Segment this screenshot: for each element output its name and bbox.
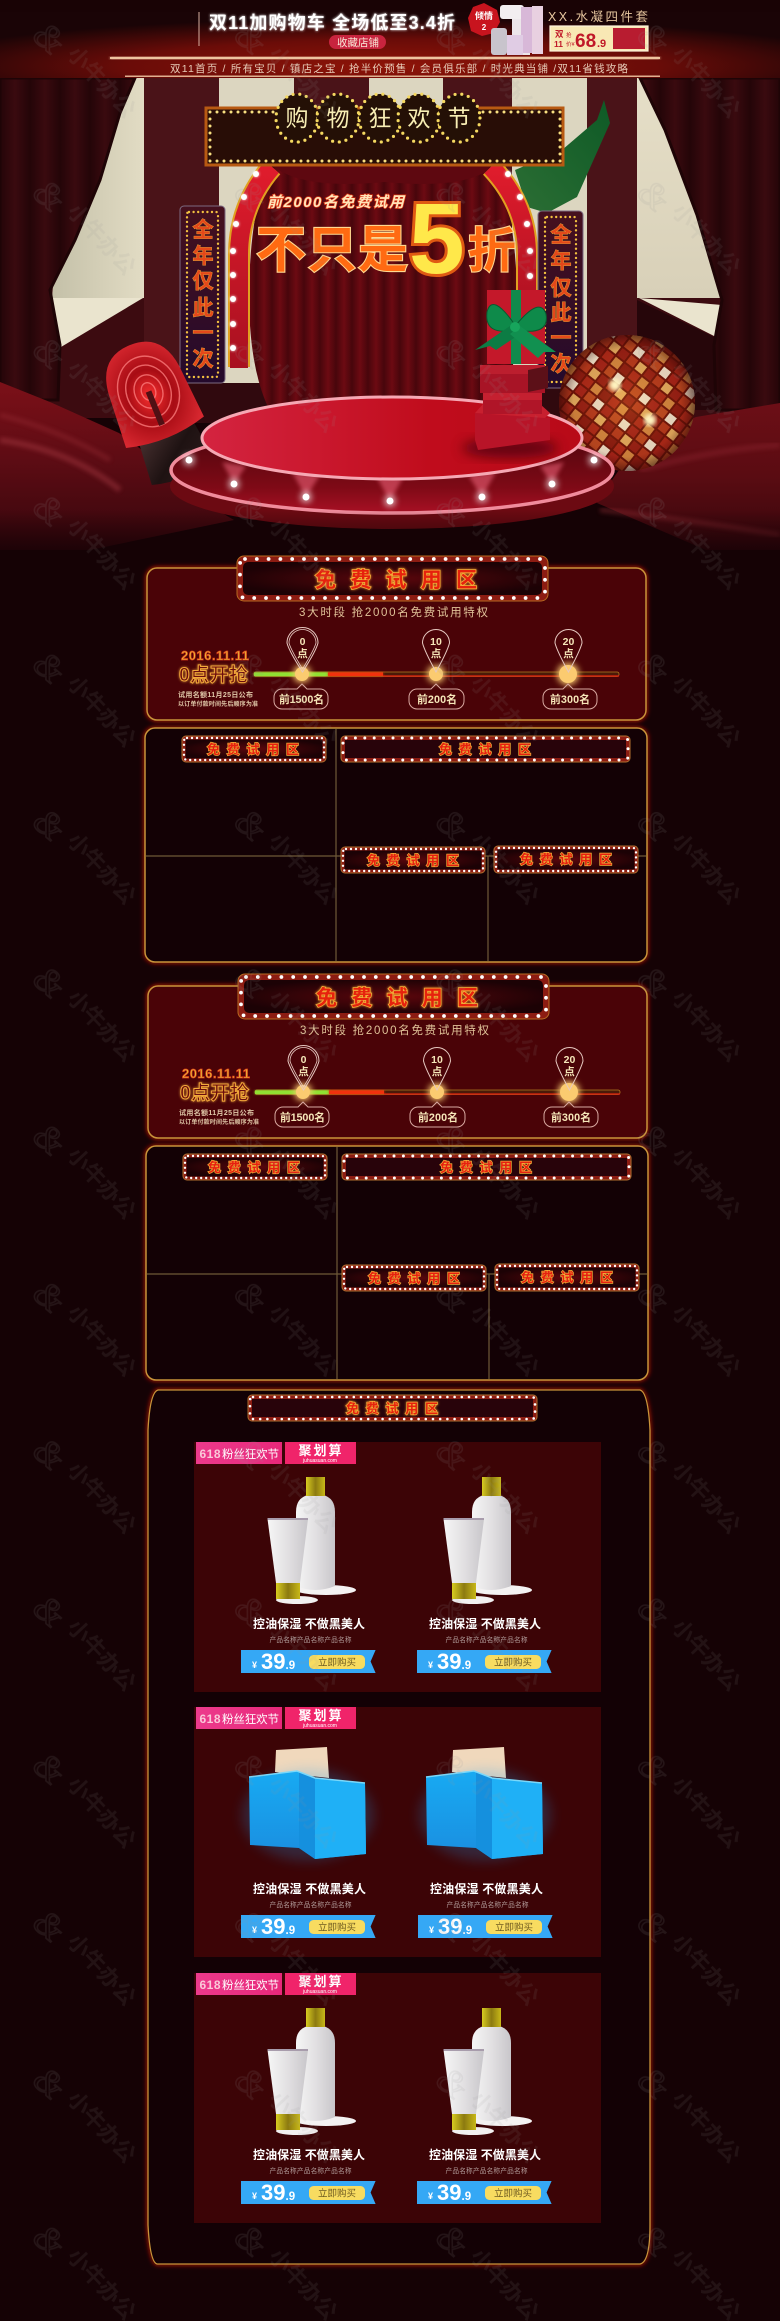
badge row 3: 618	[196, 1973, 282, 1995]
right wall shadow block	[637, 300, 716, 410]
badge: 聚划算: 聚划算	[298, 1443, 342, 1458]
panel	[147, 568, 646, 720]
side board: left: 此	[192, 297, 214, 320]
stage spotlight cones	[222, 462, 564, 501]
pin 2: 20点: 20	[564, 1054, 575, 1066]
grid 2 lines	[147, 1147, 647, 1379]
bubble 2: 前200名	[410, 1102, 465, 1127]
hero wall: stripes	[144, 78, 637, 423]
headline: 前2000名免费试用	[267, 194, 406, 211]
headline	[256, 183, 516, 295]
header lower rule	[125, 76, 660, 77]
plate: C	[341, 847, 485, 873]
badge row 2: 618: 粉丝狂欢节	[222, 1712, 279, 1726]
bubble 2: 前300名: 前300名	[551, 1110, 591, 1124]
price ribbon row 3b: ¥	[428, 2191, 433, 2201]
title plate	[237, 556, 548, 601]
price ribbon row 2b: ¥	[429, 1925, 434, 1935]
price ribbon row 3: 39	[261, 2180, 285, 2205]
section: product grid 1	[145, 728, 647, 962]
price ribbon row 2: 立即购买	[318, 1922, 356, 1934]
price ribbon 2: 立即购买	[494, 1656, 532, 1668]
header price box: 双	[555, 29, 564, 39]
price ribbon row 2: .9	[286, 1925, 295, 1937]
header price box: 价¥	[566, 41, 576, 48]
curtain: right	[640, 78, 780, 410]
header price box	[550, 26, 648, 52]
marquee arch	[230, 167, 533, 368]
price ribbon row 2	[241, 1914, 376, 1939]
date block 2: 2016.11.11	[182, 1066, 250, 1081]
headline: 折	[468, 225, 516, 278]
gift box stack	[462, 365, 558, 458]
plate: D: 免费试用区	[520, 852, 612, 867]
sign: 购物狂欢节: 购	[286, 105, 308, 131]
pin: 10点	[422, 629, 450, 672]
plate 2: B: 免费试用区	[440, 1160, 532, 1175]
badge row 3: 聚划算	[285, 1973, 356, 1995]
badge: 聚划算: juhuasuan.com	[302, 1458, 337, 1464]
header nav: 双11首页 / 所有宝贝 / 镇店之宝 / 抢半价预售 / 会员俱乐部 / 时光典当铺 /双11省钱攻略	[170, 62, 628, 75]
product subtitle row 2: 产品名称产品名称产品名称	[270, 1900, 352, 1909]
date block 2: 0点开抢	[180, 1081, 249, 1104]
price ribbon row 3b: 立即购买	[494, 2188, 532, 2200]
badge row 2: 618	[196, 1707, 282, 1729]
card 1 background	[194, 1442, 601, 1692]
bubble 2: 前1500名	[275, 1102, 329, 1127]
grid glow	[145, 728, 647, 962]
side board: right: 此	[550, 302, 572, 325]
header price box: 68	[575, 31, 596, 52]
hero wall: right cream window	[637, 78, 722, 298]
stage	[170, 397, 614, 529]
pin: 0点	[287, 628, 318, 672]
header price box: 11	[554, 39, 563, 49]
section: free trial timeline 2	[148, 974, 647, 1138]
plate: A: 免费试用区	[207, 742, 299, 757]
product subtitle: 产品名称产品名称产品名称	[270, 1635, 352, 1644]
header bar	[0, 0, 780, 78]
header product set: 2	[482, 23, 487, 32]
gift box with green bow	[475, 290, 556, 364]
product: blue box 2	[419, 1747, 551, 1861]
product title row 2: 控油保湿 不做黑美人	[253, 1881, 366, 1896]
badge: 聚划算	[285, 1442, 356, 1464]
title plate: 免费试用区	[315, 569, 477, 592]
card row 2	[194, 1707, 601, 1957]
timeline track	[254, 672, 619, 676]
price ribbon 2	[417, 1649, 552, 1674]
side board: right: 一	[550, 327, 572, 350]
side board: left: 次	[192, 348, 214, 371]
date block	[178, 648, 258, 708]
curtain swag	[272, 165, 494, 184]
pin 2: 20点	[556, 1048, 583, 1090]
pin 2: 10点: 点	[432, 1065, 443, 1078]
price ribbon 2: ¥	[428, 1660, 433, 1670]
timeline glow dots	[295, 665, 577, 683]
hero: stage scene	[0, 78, 780, 565]
hero wall: left cream window	[52, 78, 144, 298]
pin: 20点	[555, 630, 582, 672]
product title: 控油保湿 不做黑美人	[253, 1616, 365, 1631]
curtain: left	[0, 78, 135, 400]
sign: 购物狂欢节: 物	[326, 105, 350, 131]
title plate 2	[238, 974, 549, 1019]
plate: C: 免费试用区	[367, 853, 459, 868]
plate 2: A: 免费试用区	[208, 1160, 300, 1175]
product title row 2b: 控油保湿 不做黑美人	[430, 1881, 543, 1896]
side board: left: 全	[192, 218, 214, 242]
products panel glow	[148, 1390, 650, 2264]
bubble: 前300名: 前300名	[550, 692, 590, 706]
date block: 2016.11.11	[181, 648, 249, 663]
date block 2: 以订单付款时间先后顺序为准	[179, 1118, 259, 1126]
badge: 618: 618	[200, 1447, 221, 1461]
pin: 10点: 点	[431, 647, 442, 660]
price ribbon row 3b: 39	[437, 2180, 461, 2205]
badge row 3: 聚划算: 聚划算	[298, 1974, 342, 1989]
price ribbon: ¥	[252, 1660, 257, 1670]
badge: 618	[196, 1442, 282, 1464]
price ribbon row 3: 立即购买	[318, 2188, 356, 2200]
side board: left: 年	[192, 245, 214, 268]
bubble: 前1500名	[274, 684, 328, 709]
panel 2 glow	[148, 986, 647, 1138]
button: collect store: 收藏店铺	[337, 36, 379, 49]
header divider	[198, 12, 200, 46]
price ribbon row 2b: 立即购买	[495, 1922, 533, 1934]
bubble 2: 前200名: 前200名	[418, 1110, 458, 1124]
product subtitle row 3b: 产品名称产品名称产品名称	[446, 2166, 528, 2175]
price ribbon: .9	[286, 1660, 295, 1672]
side board: right: 全	[550, 223, 572, 247]
price ribbon: 39	[261, 1649, 285, 1674]
price ribbon row 2b	[418, 1914, 553, 1939]
sign: 购物狂欢节: 节	[448, 105, 470, 131]
products plate: 免费试用区	[346, 1401, 438, 1416]
pin 2: 0点	[288, 1046, 319, 1090]
hero wall: maroon back wall	[0, 78, 780, 418]
stage lights	[186, 456, 598, 504]
bubble 2: 前1500名: 前1500名	[280, 1110, 325, 1124]
product subtitle row 2b: 产品名称产品名称产品名称	[446, 1900, 529, 1909]
drape: left	[0, 382, 234, 550]
grid lines	[146, 729, 646, 961]
date block 2	[179, 1066, 259, 1126]
product title 2: 控油保湿 不做黑美人	[429, 1616, 541, 1631]
badge row 2: 聚划算	[285, 1707, 356, 1729]
plate: B	[341, 736, 630, 762]
plate: A	[182, 736, 326, 762]
panel glow	[147, 568, 646, 720]
price ribbon 2: .9	[462, 1660, 471, 1672]
side board: left	[180, 206, 225, 383]
date block: 0点开抢	[179, 663, 248, 686]
product: bottle and tube row 3b	[444, 2008, 532, 2135]
badge row 3: 聚划算: juhuasuan.com	[302, 1989, 337, 1995]
section: free trial timeline 1	[147, 556, 646, 720]
bubble: 前200名: 前200名	[417, 692, 457, 706]
side board: right: 仅	[550, 277, 572, 300]
pin: 20点: 点	[563, 647, 574, 660]
header price box: 抢	[566, 31, 572, 39]
product: bottle and tube 2	[444, 1477, 532, 1604]
price ribbon	[241, 1649, 376, 1674]
bubble: 前200名	[409, 684, 464, 709]
side board: left: 仅	[192, 270, 214, 293]
leaf	[515, 100, 610, 213]
header title: 双11加购物车 全场低至3.4折	[209, 12, 455, 33]
price ribbon row 3	[241, 2180, 376, 2205]
products plate	[248, 1395, 537, 1421]
header product set	[468, 3, 543, 55]
pin: 10点: 10	[430, 636, 442, 648]
sign: 购物狂欢节: 欢	[408, 105, 430, 131]
header product set: 倾情	[475, 10, 493, 21]
plate 2: C: 免费试用区	[368, 1271, 460, 1286]
plate 2: D: 免费试用区	[521, 1270, 613, 1285]
header product name: XX.水凝四件套	[548, 9, 648, 24]
date block 2: 试用名额11月25日公布	[179, 1108, 254, 1117]
plate 2: A	[183, 1154, 327, 1180]
headline: 5	[409, 183, 465, 295]
date block: 试用名额11月25日公布	[178, 690, 253, 699]
badge row 3: 618: 618	[200, 1978, 221, 1992]
drape: right	[597, 403, 780, 550]
badge row 2: 618: 618	[200, 1712, 221, 1726]
price ribbon row 2: 39	[261, 1914, 285, 1939]
button: collect store	[329, 35, 386, 49]
product subtitle row 3: 产品名称产品名称产品名称	[270, 2166, 352, 2175]
price ribbon row 3: ¥	[252, 2191, 257, 2201]
header price box: .9	[597, 38, 606, 50]
product subtitle 2: 产品名称产品名称产品名称	[446, 1635, 528, 1644]
badge row 2: 聚划算: juhuasuan.com	[302, 1723, 337, 1729]
panel 2	[148, 986, 647, 1138]
disco ball	[559, 335, 695, 471]
price ribbon row 3b: .9	[462, 2191, 471, 2203]
card 3 background	[194, 1973, 601, 2223]
price ribbon row 2b: 39	[438, 1914, 462, 1939]
header rule	[110, 57, 660, 59]
timeline glow dots 2	[296, 1083, 578, 1101]
product: bottle and tube	[268, 1477, 356, 1604]
products panel	[148, 1390, 650, 2264]
plate 2: D	[495, 1264, 639, 1291]
price ribbon row 3b	[417, 2180, 552, 2205]
side board: right	[538, 211, 583, 388]
bubble 2: 前300名	[544, 1102, 598, 1127]
card 2 background	[194, 1707, 601, 1957]
title plate 2: 免费试用区	[316, 987, 478, 1010]
side board: left: 一	[192, 322, 214, 345]
product title row 3b: 控油保湿 不做黑美人	[429, 2147, 541, 2162]
card row 1	[194, 1442, 601, 1692]
product: bottle and tube row 3	[268, 2008, 356, 2135]
product title row 3: 控油保湿 不做黑美人	[253, 2147, 365, 2162]
hero wall: left cream ledge	[52, 298, 143, 347]
headline: 不只是	[256, 222, 408, 278]
grid 2 glow	[146, 1146, 648, 1380]
plate: D	[494, 846, 638, 873]
badge row 3: 618: 粉丝狂欢节	[222, 1978, 279, 1992]
pin 2: 0点: 点	[298, 1065, 309, 1078]
hero wall: right cream ledge	[639, 298, 722, 337]
product: blue box	[242, 1747, 374, 1861]
badge: 618: 粉丝狂欢节	[222, 1447, 279, 1461]
pin 2: 0点: 0	[301, 1054, 307, 1066]
price ribbon row 2: ¥	[252, 1925, 257, 1935]
sign: 购物狂欢节	[206, 94, 563, 165]
pin: 0点: 点	[297, 647, 308, 660]
date block: 以订单付款时间先后顺序为准	[178, 700, 258, 708]
sign: 购物狂欢节: 狂	[368, 105, 392, 131]
grid panel	[145, 728, 647, 962]
bubble: 前1500名: 前1500名	[279, 692, 324, 706]
red centre curtain	[249, 165, 517, 420]
price ribbon row 3: .9	[286, 2191, 295, 2203]
plate 2: B	[342, 1154, 631, 1180]
bubble: 前300名	[543, 684, 597, 709]
pin: 20点: 20	[563, 636, 574, 648]
side board: right: 年	[550, 250, 572, 273]
card row 3	[194, 1973, 601, 2223]
price ribbon: 立即购买	[318, 1656, 356, 1668]
subtitle 2: 3大时段 抢2000名免费试用特权	[300, 1023, 490, 1037]
plate: B: 免费试用区	[439, 742, 531, 757]
section: product grid 2	[146, 1146, 648, 1380]
hero bottom fade	[0, 510, 780, 565]
side board: right: 次	[550, 353, 572, 376]
price ribbon row 2b: .9	[462, 1925, 472, 1937]
pin: 0点: 0	[300, 636, 306, 648]
plate 2: C	[342, 1265, 486, 1291]
pin 2: 10点	[424, 1047, 450, 1090]
subtitle: 3大时段 抢2000名免费试用特权	[299, 605, 488, 619]
badge row 2: 聚划算: 聚划算	[298, 1708, 342, 1723]
siren	[91, 329, 222, 493]
timeline track 2	[255, 1090, 620, 1094]
section: products	[148, 1390, 650, 2264]
pin 2: 20点: 点	[564, 1065, 575, 1078]
pin 2: 10点: 10	[431, 1054, 443, 1066]
price ribbon 2: 39	[437, 1649, 461, 1674]
grid 2 panel	[146, 1146, 648, 1380]
